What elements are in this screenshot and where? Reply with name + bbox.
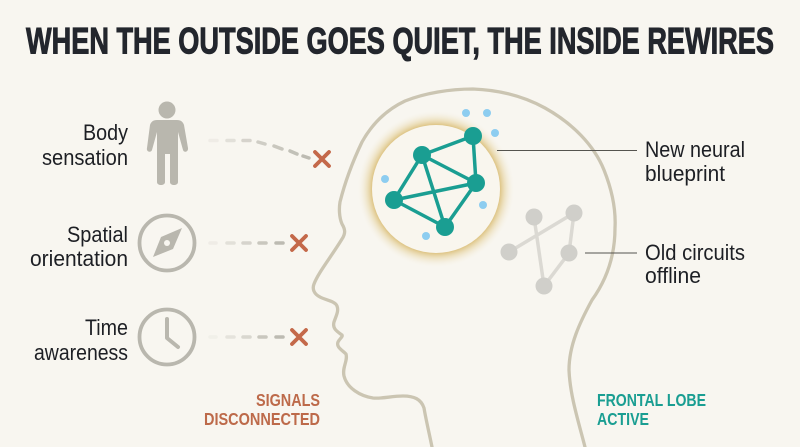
icon: red x time bbox=[292, 330, 306, 344]
label: old circuits offline bbox=[645, 240, 745, 288]
new neural network bbox=[357, 109, 515, 268]
head outline bbox=[313, 89, 615, 447]
label: new neural blueprint bbox=[645, 137, 745, 186]
old circuits network bbox=[500, 204, 582, 294]
leader line: old circuits bbox=[585, 252, 637, 254]
row: spatial orientation bbox=[30, 216, 306, 271]
icon: compass bbox=[140, 216, 194, 270]
icon: red x body bbox=[315, 152, 329, 166]
row: body sensation bbox=[42, 102, 329, 185]
label: time awareness: awareness bbox=[34, 340, 128, 365]
label: spatial orientation: Spatial bbox=[67, 222, 128, 247]
icon: person bbox=[147, 102, 188, 185]
faded nodes bbox=[500, 204, 582, 294]
label: spatial orientation bbox=[30, 222, 128, 271]
label: signals disconnected: DISCONNECTED bbox=[204, 409, 320, 429]
leader line: new neural blueprint bbox=[497, 150, 637, 152]
label: body sensation: Body bbox=[83, 120, 128, 145]
glow halo bbox=[357, 110, 515, 268]
dashed signal: body bbox=[210, 140, 309, 158]
label: frontal lobe active: ACTIVE bbox=[597, 409, 649, 429]
label: signals disconnected bbox=[204, 390, 320, 429]
label: frontal lobe active bbox=[597, 390, 706, 429]
dashed signal: time bbox=[210, 335, 283, 339]
label: time awareness bbox=[34, 315, 128, 365]
blue sparks bbox=[381, 109, 499, 240]
icon: red x spatial bbox=[292, 236, 306, 250]
faded edges bbox=[509, 213, 574, 286]
network edges bbox=[394, 136, 476, 227]
label: spatial orientation: orientation bbox=[30, 246, 128, 271]
label: body sensation: sensation bbox=[42, 145, 128, 170]
label: new neural blueprint: blueprint bbox=[645, 161, 725, 186]
network nodes bbox=[385, 127, 485, 236]
light disc bbox=[372, 125, 500, 253]
label: old circuits offline: Old circuits bbox=[645, 240, 745, 265]
label: old circuits offline: offline bbox=[645, 263, 701, 288]
label: time awareness: Time bbox=[85, 315, 128, 340]
label: body sensation bbox=[42, 120, 128, 170]
label: signals disconnected: SIGNALS bbox=[256, 390, 320, 410]
label: new neural blueprint: New neural bbox=[645, 137, 745, 162]
label: frontal lobe active: FRONTAL LOBE bbox=[597, 390, 706, 410]
icon: clock bbox=[140, 310, 194, 364]
row: time awareness bbox=[34, 310, 306, 365]
dashed signal: spatial bbox=[210, 241, 283, 245]
